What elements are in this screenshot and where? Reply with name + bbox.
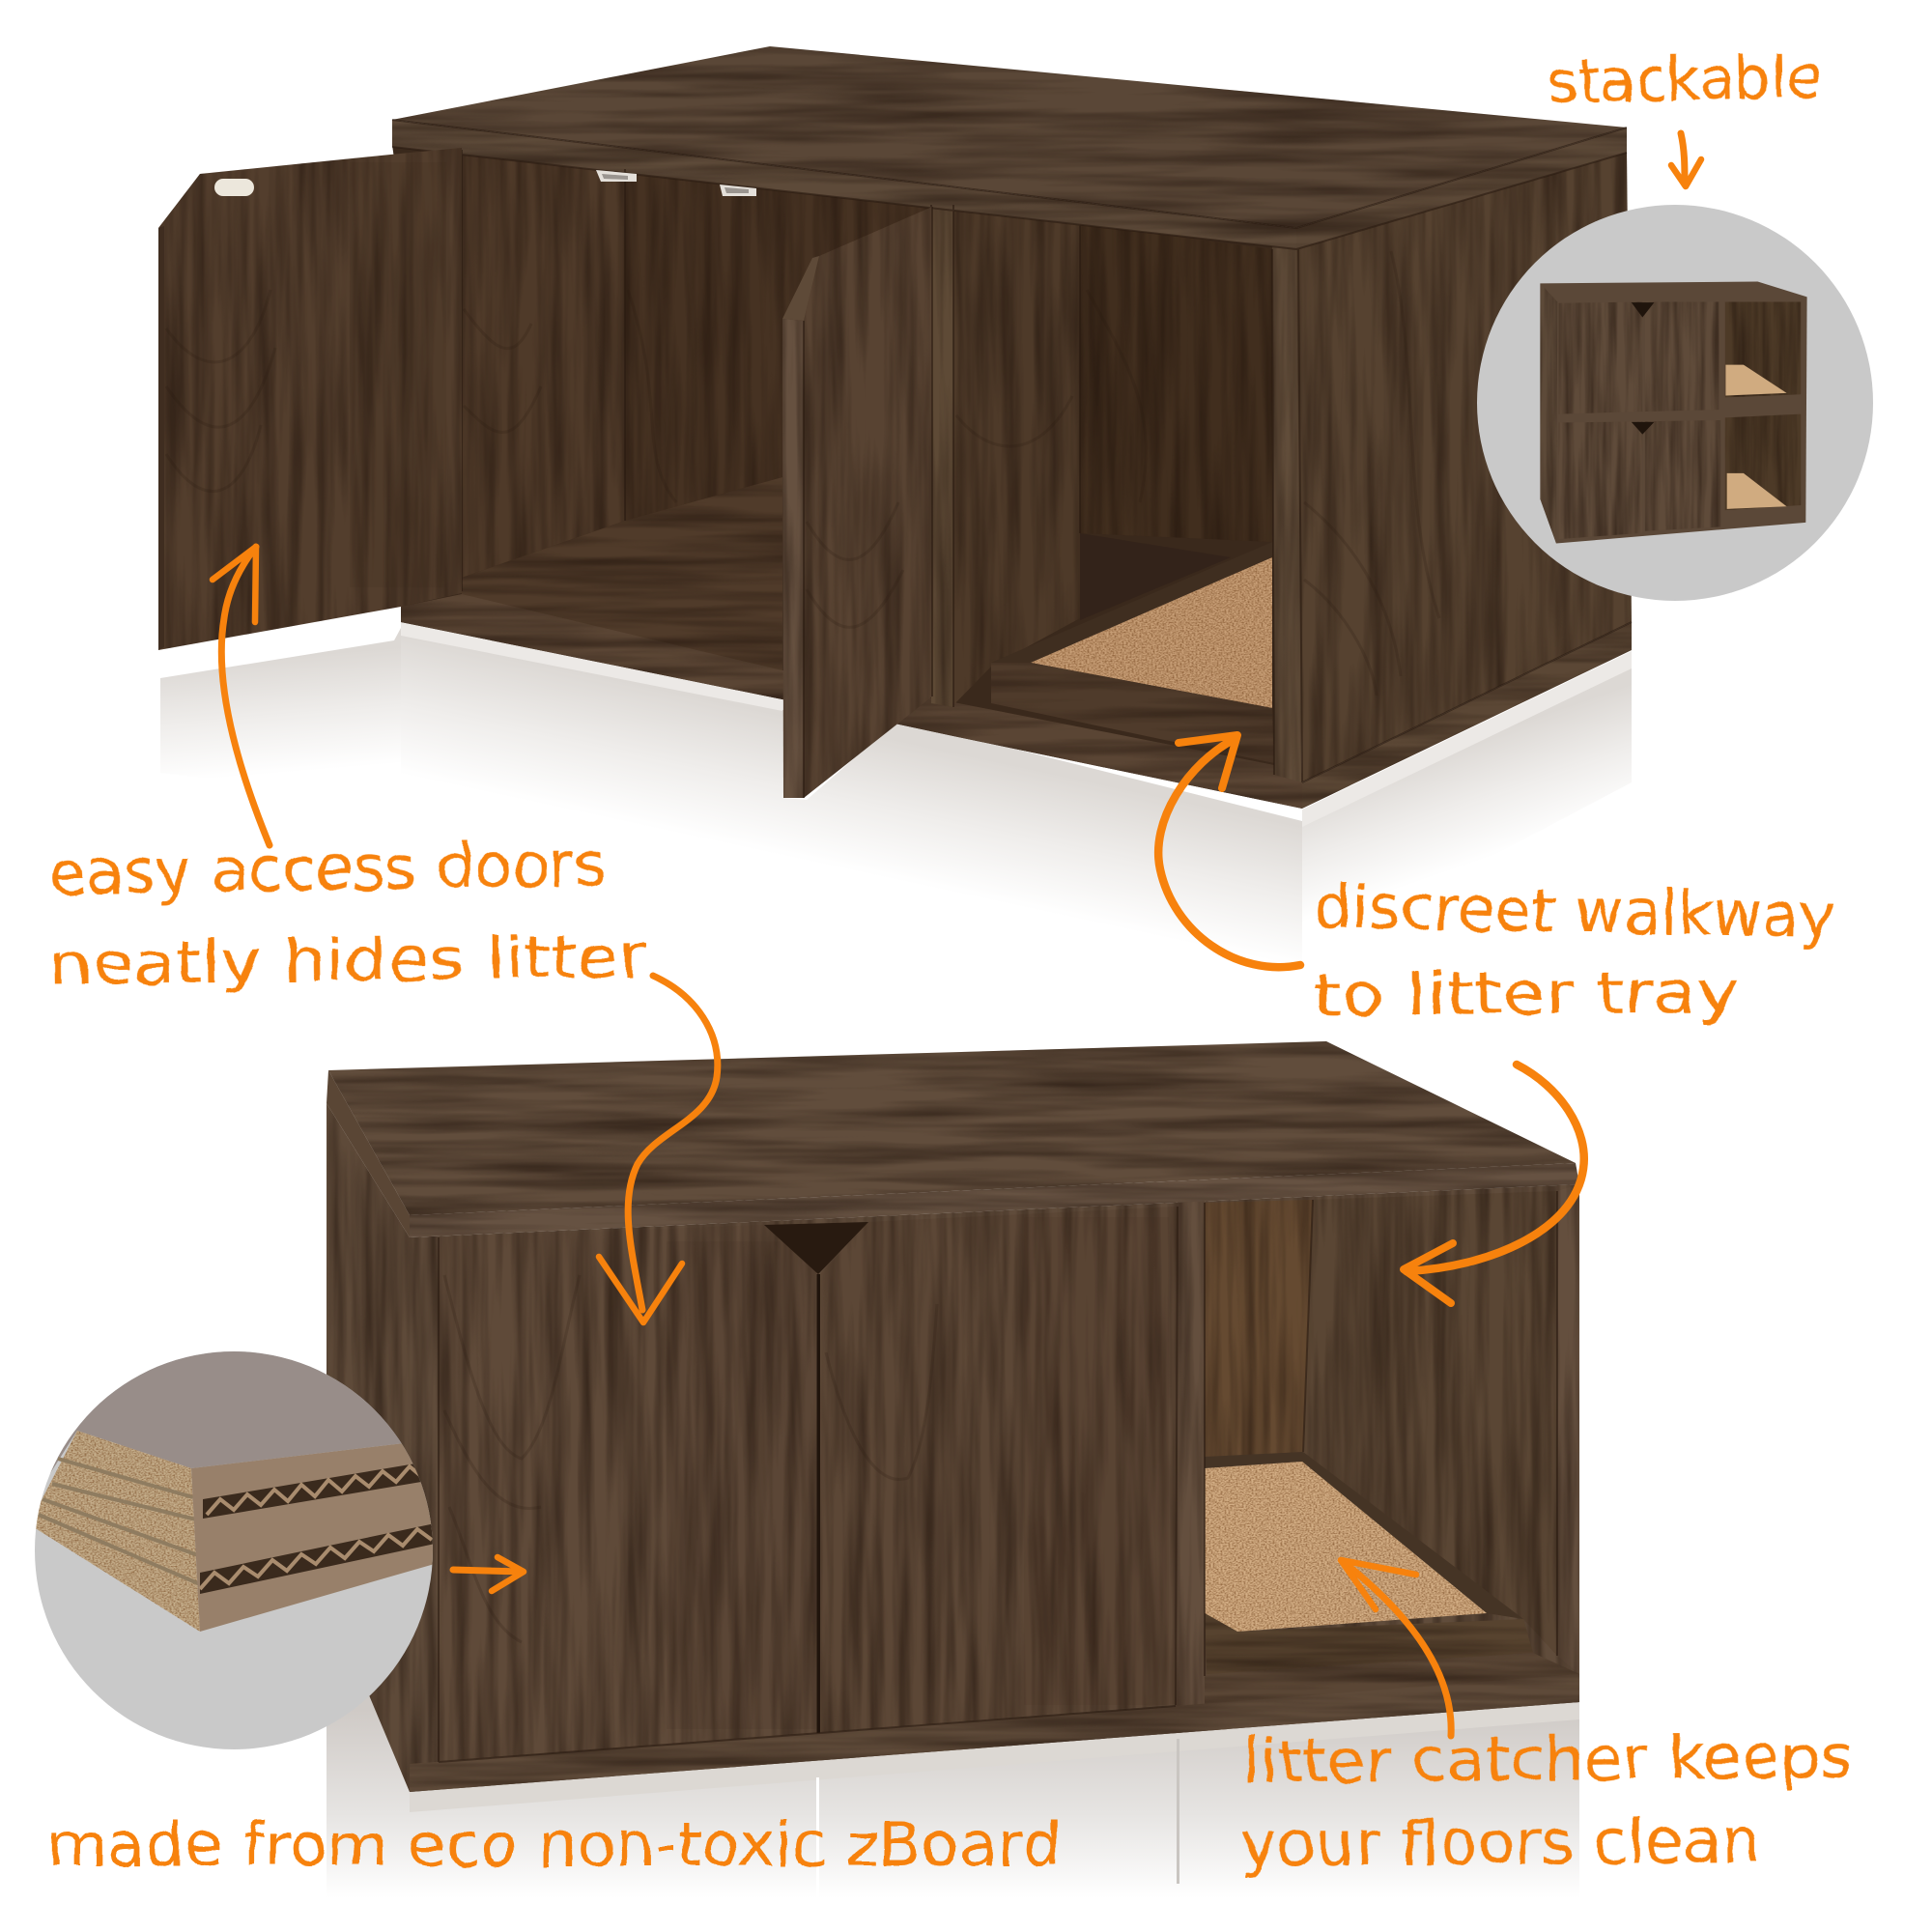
arrow: stackable <box>1671 133 1701 186</box>
right closed door <box>820 1207 1178 1732</box>
callout circle: stackable <box>1477 205 1873 601</box>
cabinet dark base silhouette <box>392 145 1302 809</box>
third compartment interior <box>953 205 1272 705</box>
callout circle: zBoard material <box>35 1351 433 1749</box>
litter compartment floor strip <box>1205 1653 1579 1710</box>
litter tray top <box>991 542 1274 763</box>
reflection: top cabinet floor reflection <box>160 618 1632 966</box>
reflection: bottom cabinet floor reflection <box>327 1594 1579 1922</box>
arrow: zBoard <box>453 1557 524 1591</box>
cabinet top left edge <box>327 1070 410 1237</box>
litter compartment right wall <box>1303 1191 1557 1656</box>
label: neatly hides litter: neatly hides litter <box>48 923 648 999</box>
litter compartment back wall <box>1205 1200 1313 1457</box>
label: made from eco non-toxic zBoard: made from eco non-toxic zBoard <box>46 1809 1062 1880</box>
compartment end post <box>1557 1184 1579 1674</box>
door and frame seams <box>439 1191 1557 1762</box>
cabinet top surface <box>328 1041 1576 1215</box>
cabinet top front edge <box>392 120 1296 249</box>
arrow: to litter tray <box>1404 1065 1584 1303</box>
corrugated board sample <box>36 1351 433 1632</box>
cabinet bottom front strip <box>401 594 1302 809</box>
left open door <box>158 148 462 650</box>
cabinet top front edge <box>410 1163 1579 1237</box>
panel: bottom cabinet with closed doors <box>327 1041 1579 1792</box>
magnetic catches <box>596 170 756 196</box>
door hinge plate <box>214 179 254 196</box>
stacked units <box>1540 281 1807 544</box>
cabinet interior left walls <box>462 150 937 678</box>
label: to litter tray: to litter tray <box>1314 958 1739 1030</box>
cabinet seams <box>392 120 1632 782</box>
cabinet left side panel <box>327 1103 410 1792</box>
cabinet bottom strip <box>410 1674 1579 1792</box>
arrow: neatly hides litter <box>599 976 718 1322</box>
cabinet top right edge <box>1296 128 1627 249</box>
cabinet right front post <box>1272 243 1302 782</box>
cabinet right side panel <box>1296 151 1632 809</box>
left closed door <box>439 1225 818 1761</box>
middle open door <box>782 207 932 798</box>
panel: top cabinet with open doors <box>158 46 1632 809</box>
arrow: discreet walkway <box>1158 735 1300 967</box>
litter tray bottom <box>1205 1452 1533 1674</box>
label: discreet walkway: discreet walkway <box>1314 871 1835 951</box>
label: litter catcher keeps: litter catcher keeps <box>1242 1720 1853 1797</box>
cabinet divider post <box>931 203 953 707</box>
door gap and finger notch <box>764 1222 868 1733</box>
label: your floors clean: your floors clean <box>1239 1804 1761 1880</box>
arrow: easy access doors <box>213 547 270 845</box>
compartment divider post <box>1176 1198 1205 1712</box>
cabinet top surface <box>392 46 1627 228</box>
arrow: litter catcher <box>1341 1560 1451 1736</box>
cabinet front frame <box>410 1184 1579 1792</box>
label: stackable: stackable <box>1548 42 1822 117</box>
label: easy access doors: easy access doors <box>48 829 607 910</box>
